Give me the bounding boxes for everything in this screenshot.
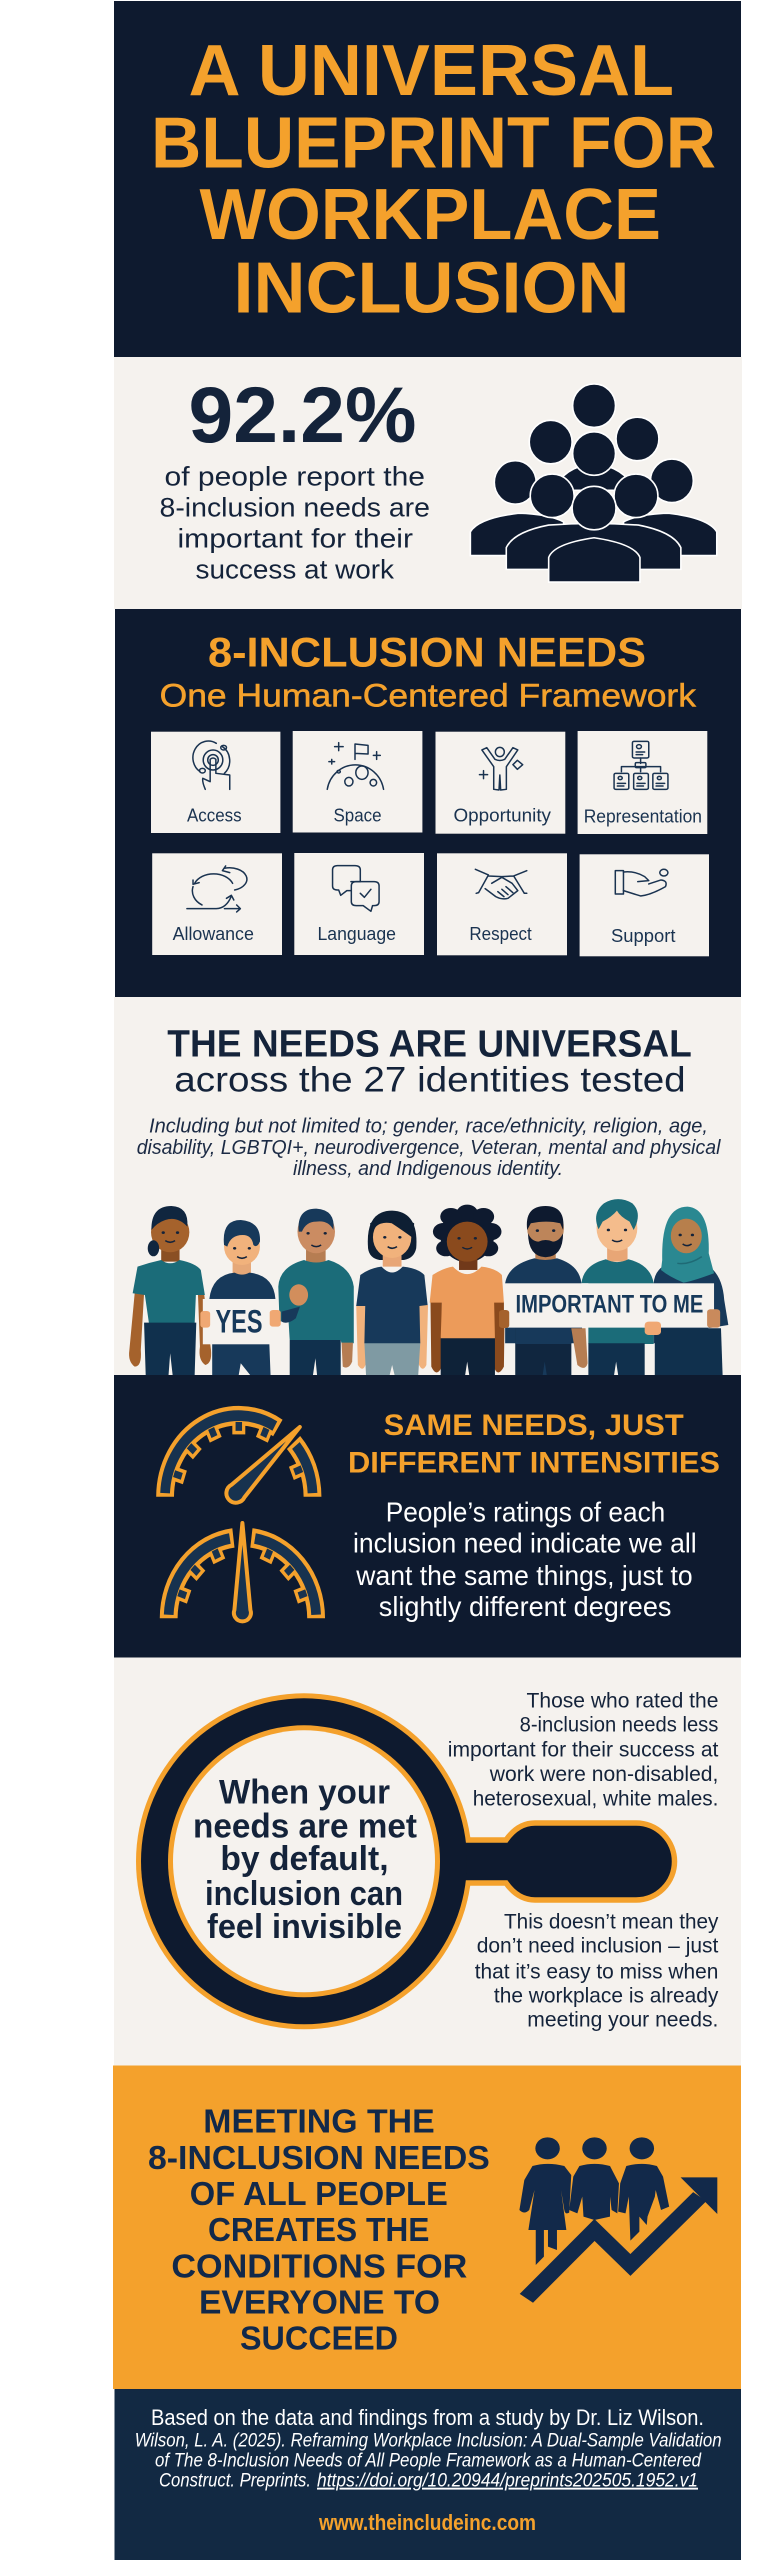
panel: 8 inclusion needs [115,609,741,997]
panel: the needs are universal [114,997,741,1375]
card: Respect [437,853,567,955]
cards grid [151,731,709,956]
text: why it matters: This doesn’t mean they [504,1910,719,1933]
identity list: illness, and Indigenous identity. [293,1158,563,1180]
panel: call to action [113,2066,741,2389]
card: Respect: Respect [469,924,532,944]
call to action text: SUCCEED [240,2319,398,2356]
card: Opportunity [436,732,565,834]
text: why it matters [475,1910,719,2032]
call to action text [148,2103,490,2356]
icon: gauge medium needle [234,1523,251,1621]
identity list: Including but not limited to; gender, race/ethnicity, religion, age, [149,1116,708,1138]
identity list: disability, LGBTQI+, neurodivergence, Veteran, mental and physical [137,1137,721,1159]
subheading: across the 27 identities tested [174,1061,686,1100]
title: INCLUSION [234,248,630,328]
icon: gauge high [165,1416,313,1497]
statistic description: 8-inclusion needs are [160,492,430,522]
text: why it matters: don’t need inclusion – just [477,1935,719,1958]
person 4 [356,1211,428,1375]
card: Space: Space [334,806,382,826]
citation [135,2431,722,2492]
call to action text: MEETING THE [203,2103,435,2140]
body text: inclusion need indicate we all [353,1528,697,1559]
citation: https://doi.org/10.20944/preprints202505.1952.v1 [317,2471,698,2492]
website: www.theincludeinc.com [318,2510,536,2535]
magnifier text [193,1773,417,1946]
heading: DIFFERENT INTENSITIES [348,1447,720,1480]
person 6 [505,1206,588,1375]
sign: YES: YES [216,1304,262,1340]
person 3 [278,1209,354,1375]
body text: slightly different degrees [379,1591,671,1622]
body text: People’s ratings of each [386,1497,665,1528]
card: Representation: Representation [584,807,702,827]
person 8 [654,1207,728,1375]
big statistic: 92.2% [188,370,416,459]
title: BLUEPRINT FOR [151,104,716,184]
title: A UNIVERSAL [188,31,674,111]
text: why it matters: meeting your needs. [527,2009,718,2032]
panel: same needs, different intensities [114,1375,741,1658]
person 5 [430,1205,505,1375]
heading: 8-INCLUSION NEEDS [208,629,646,676]
illustration: group of diverse people [129,1199,728,1375]
card: Allowance [152,853,282,955]
card: Allowance: Allowance [173,924,254,944]
sign backgrounds [203,1283,714,1344]
text: who rated lower [448,1689,719,1811]
card: Language [294,853,424,955]
text: why it matters: that it’s easy to miss when [475,1960,718,1983]
person 7 [581,1199,654,1375]
icon: gauge high needle [222,1420,307,1507]
statistic description: success at work [196,554,395,584]
magnifier text: needs are met [193,1807,417,1845]
identity list [137,1116,721,1180]
card: Space [293,731,422,832]
call to action text: CREATES THE [208,2211,429,2248]
call to action text: 8-INCLUSION NEEDS [148,2139,490,2176]
panel: 92.2% statistic [114,357,742,609]
icon: magnifying glass [136,1693,674,2029]
text: who rated lower: important for their success at [448,1739,719,1762]
card: Support [580,854,709,956]
title: WORKPLACE [200,175,661,255]
subheading: One Human-Centered Framework [160,678,697,714]
card: Representation [578,731,707,834]
sign: IMPORTANT TO ME: IMPORTANT TO ME [516,1291,703,1319]
citation: Wilson, L. A. (2025). Reframing Workplace Inclusion: A Dual-Sample Validation [135,2431,722,2452]
person 1 [129,1206,211,1375]
title [151,31,716,328]
icon: gauge medium [169,1538,316,1618]
card: Opportunity: Opportunity [454,806,551,826]
card: Access [151,732,280,833]
person 2 [209,1220,275,1375]
heading [348,1409,720,1480]
card: Language: Language [318,924,396,944]
hands holding signs [200,1309,720,1335]
statistic description: important for their [178,524,413,554]
text: who rated lower: 8-inclusion needs less [520,1714,718,1737]
icon: crowd of people [470,384,717,582]
citation: Construct. Preprints. [159,2471,311,2492]
magnifier text: feel invisible [207,1908,402,1946]
citation: of The 8-Inclusion Needs of All People Framework as a Human-Centered [155,2451,702,2472]
card: Support: Support [611,926,676,946]
call to action text: OF ALL PEOPLE [190,2175,448,2212]
statistic description: of people report the [164,462,425,492]
call to action text: EVERYONE TO [199,2283,440,2320]
text: why it matters: the workplace is already [494,1984,719,2007]
card: Access: Access [187,806,242,826]
body text: want the same things, just to [355,1560,693,1591]
heading: SAME NEEDS, JUST [384,1409,684,1442]
magnifier text: inclusion can [205,1875,403,1913]
heading: THE NEEDS ARE UNIVERSAL [167,1024,692,1066]
text: who rated lower: heterosexual, white males. [473,1788,718,1811]
source statement: Based on the data and findings from a study by Dr. Liz Wilson. [151,2405,704,2430]
icon: people and rising arrow [519,2137,717,2298]
text: who rated lower: Those who rated the [526,1689,718,1712]
body text [353,1497,697,1622]
magnifier text: by default, [220,1840,389,1878]
panel: inclusion can feel invisible [114,1658,741,2066]
magnifier text: When your [219,1773,390,1811]
statistic description [160,462,430,584]
panel: title header [114,1,741,357]
panel: footer [114,2389,741,2560]
text: who rated lower: work were non-disabled, [489,1763,718,1786]
call to action text: CONDITIONS FOR [171,2247,467,2284]
